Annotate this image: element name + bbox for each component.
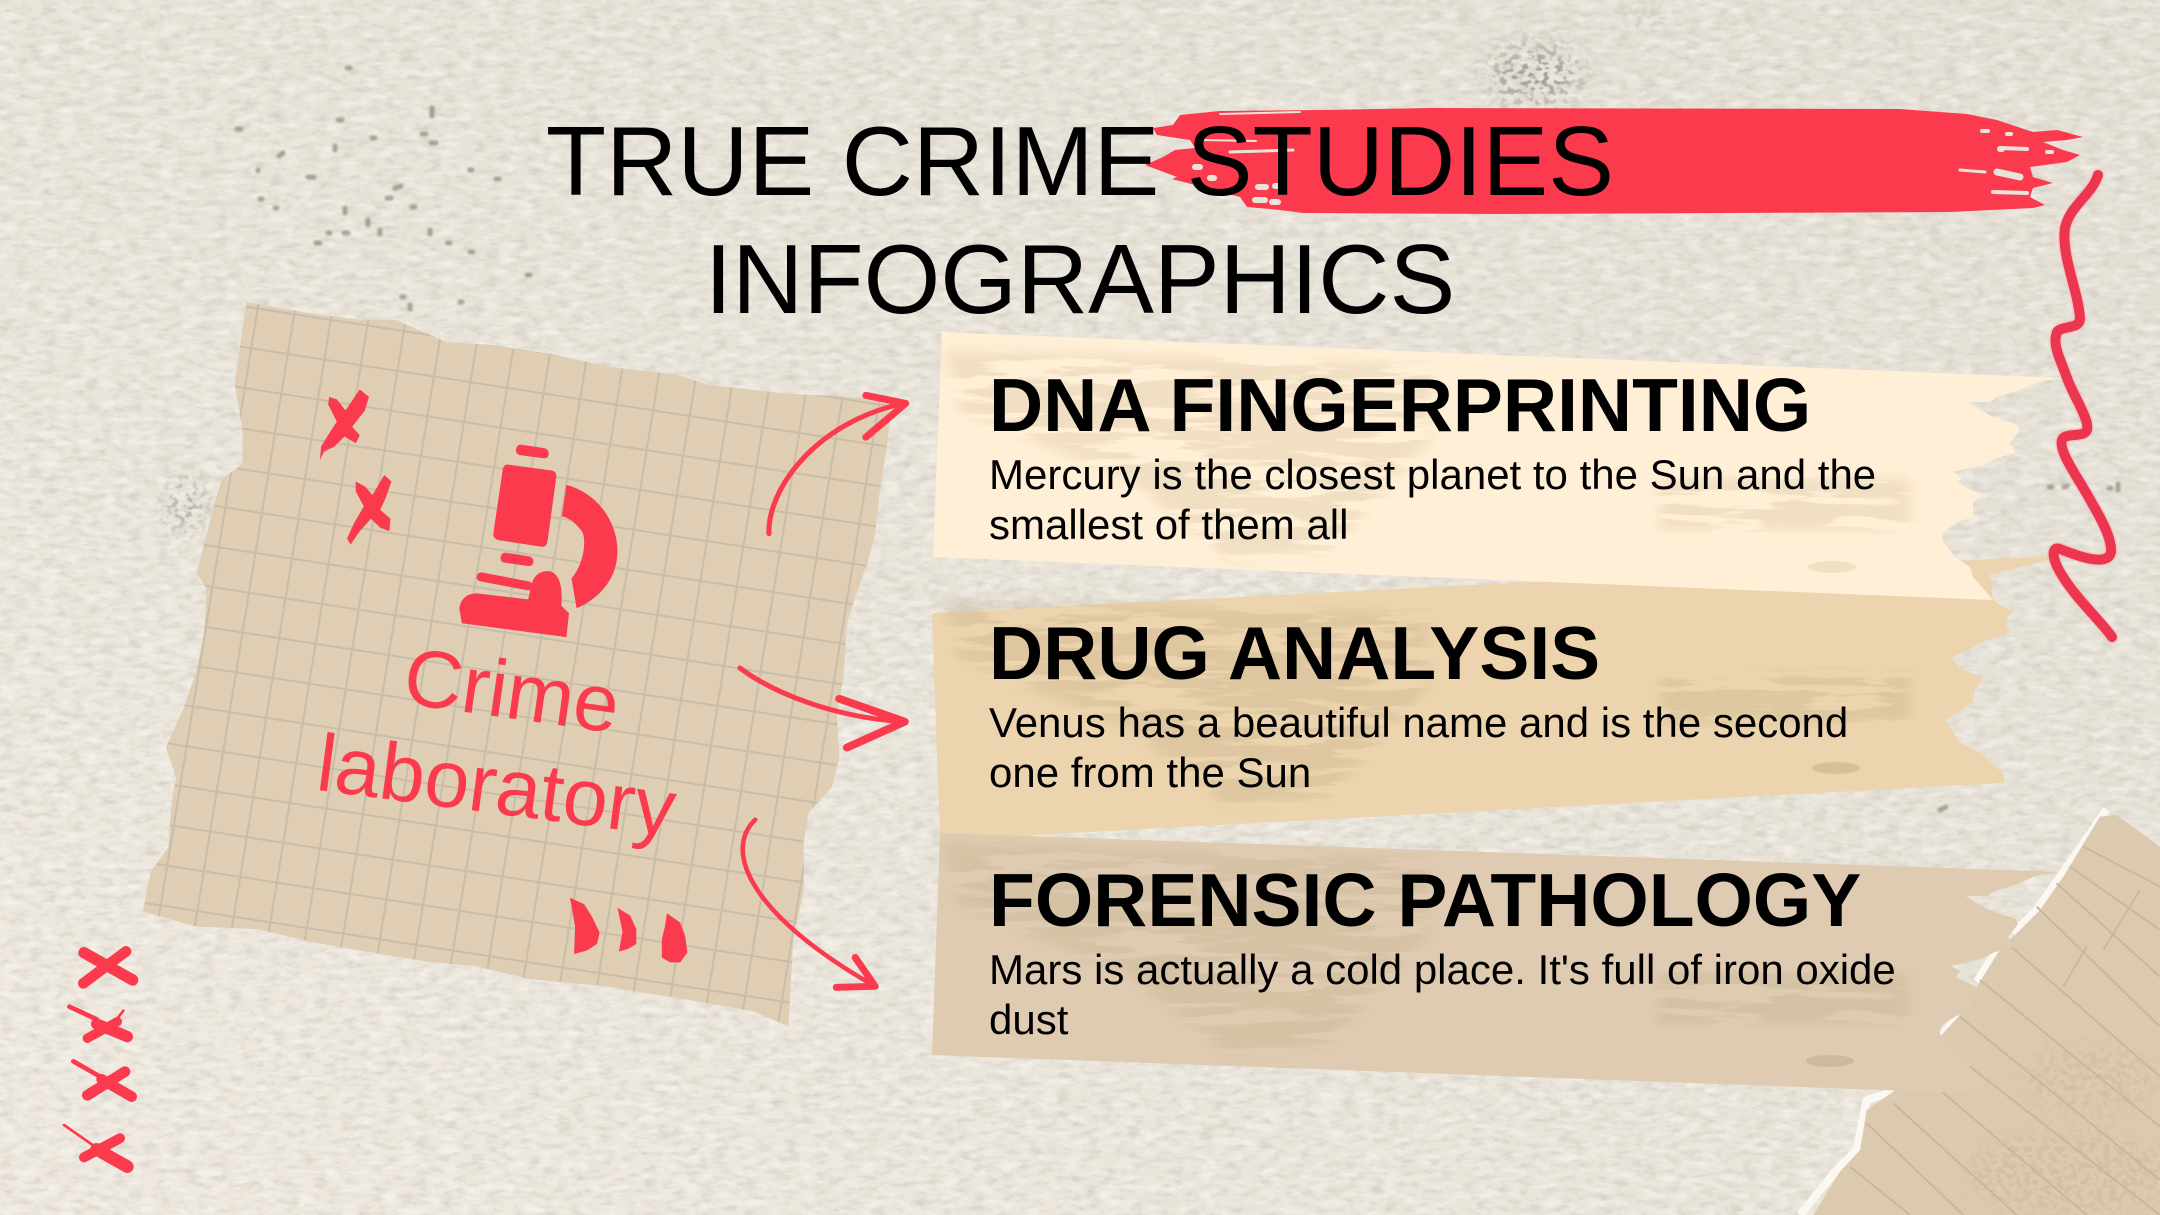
squiggle: red scribble on right xyxy=(2054,175,2112,637)
note label: Crime laboratory: Crime xyxy=(399,632,625,751)
panel: torn graph paper note xyxy=(143,302,906,1026)
icon: scribbled crosses on note xyxy=(320,389,391,545)
note label: Crime laboratory: laboratory xyxy=(312,718,681,854)
icon: column of red crosses xyxy=(64,951,133,1167)
panel: forensic pathology text: FORENSIC PATHOLOGY xyxy=(989,858,1861,942)
panel: DNA fingerprinting text: DNA FINGERPRINTING xyxy=(989,363,1811,447)
icon: microscope xyxy=(459,445,617,637)
red brush stroke behind title xyxy=(1145,108,2083,214)
arrow: to drug analysis xyxy=(740,668,905,748)
title: TRUE CRIME STUDIES xyxy=(546,106,1614,216)
arrow: to DNA fingerprinting xyxy=(769,395,906,534)
note label: Crime laboratory xyxy=(312,632,681,854)
panel: DNA fingerprinting text: smallest of them all xyxy=(989,501,1348,548)
icon: three chalk marks xyxy=(570,898,687,962)
tape: drug analysis xyxy=(932,556,2052,840)
panel: drug analysis text: Venus has a beautiful name and is the second xyxy=(989,699,1848,746)
tape: DNA fingerprinting xyxy=(933,332,2062,600)
tape: forensic pathology xyxy=(932,833,2060,1094)
panel: forensic pathology text xyxy=(989,858,1896,1043)
panel: DNA fingerprinting text: Mercury is the closest planet to the Sun and the xyxy=(989,451,1876,498)
panel: forensic pathology text: dust xyxy=(989,996,1069,1043)
panel: drug analysis text xyxy=(989,611,1848,796)
title xyxy=(546,106,1614,334)
decoration: torn notebook corner xyxy=(1800,809,2160,1215)
title: INFOGRAPHICS xyxy=(705,224,1455,334)
panel: drug analysis text: one from the Sun xyxy=(989,749,1311,796)
panel: DNA fingerprinting text xyxy=(989,363,1876,548)
panel: forensic pathology text: Mars is actually a cold place. It's full of iron oxide xyxy=(989,946,1896,993)
panel: drug analysis text: DRUG ANALYSIS xyxy=(989,611,1600,695)
arrow: to forensic pathology xyxy=(743,820,875,987)
